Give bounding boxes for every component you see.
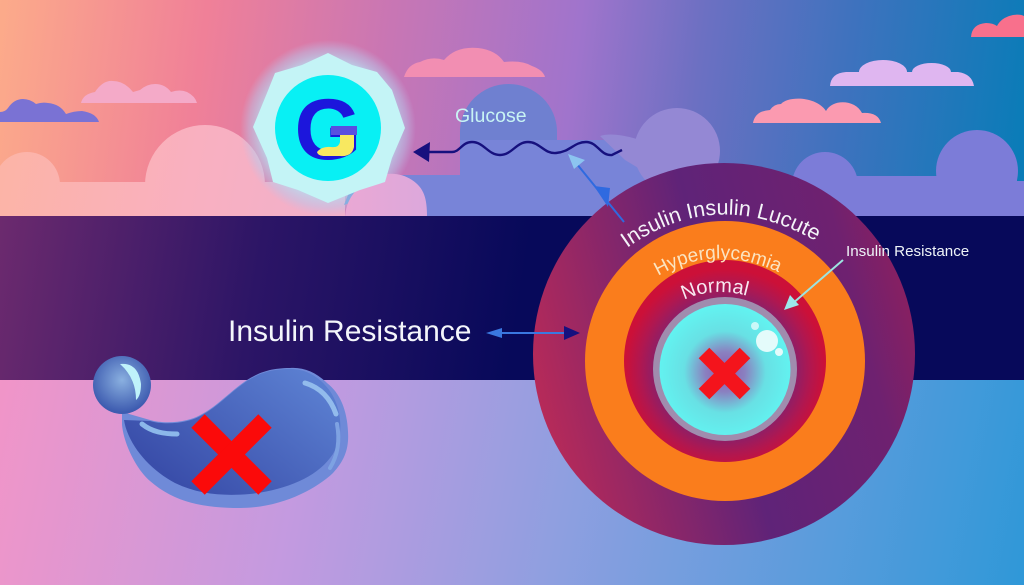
grey ring <box>653 297 797 441</box>
pink cloud right of badge <box>345 174 427 217</box>
arrow head <box>413 142 430 162</box>
insulin resistance callout right: Insulin Resistance <box>846 243 969 260</box>
lilac cloud behind wave <box>600 135 660 178</box>
dark band <box>0 216 1024 380</box>
cyan core <box>660 304 790 435</box>
sky background <box>0 0 1024 217</box>
large pink cloud left <box>0 125 345 245</box>
letter G: G <box>295 82 361 178</box>
label: Insulin Insulin Lucute: Insulin Insulin Lucute <box>620 199 819 247</box>
pancreas droplet <box>93 356 348 508</box>
small cloud top left <box>81 81 197 103</box>
blue sliver under badge <box>344 186 368 205</box>
insulin resistance main label: Insulin Resistance <box>228 315 471 348</box>
orange ring <box>585 221 865 501</box>
crimson ring <box>624 260 826 462</box>
badge polygon <box>253 53 405 203</box>
purple bar <box>331 126 357 135</box>
right periwinkle cloud <box>792 152 858 218</box>
small cloud far left <box>0 99 99 122</box>
ball highlight <box>120 364 141 400</box>
pink cloud top right corner <box>971 15 1024 37</box>
concentric circles diagram <box>533 163 915 545</box>
blue double arrow to glucose wave <box>568 154 624 222</box>
pink cloud mid right <box>753 99 881 123</box>
label: Hyperglycemia: Hyperglycemia <box>653 244 780 275</box>
double arrow to circles <box>486 326 580 340</box>
label: Normal: Normal <box>680 280 750 299</box>
red cross centre <box>704 353 745 394</box>
lilac cloud top right <box>830 60 974 86</box>
glucose wave arrow <box>413 142 622 162</box>
droplet inner body <box>124 369 340 495</box>
ball <box>93 356 151 414</box>
yellow mark <box>317 135 354 156</box>
pink cloud top centre <box>404 48 545 77</box>
floor background <box>0 380 1024 585</box>
periwinkle back clouds <box>400 84 1024 218</box>
droplet highlights <box>142 383 338 468</box>
red cross <box>198 421 265 488</box>
bubble highlights <box>751 322 783 356</box>
badge halo <box>240 40 416 216</box>
cyan disc <box>275 75 381 181</box>
droplet outer body <box>122 368 348 508</box>
glucose label: Glucose <box>455 105 527 127</box>
outer ring <box>533 163 915 545</box>
glucose badge <box>253 53 405 203</box>
callout arrow <box>784 260 843 310</box>
